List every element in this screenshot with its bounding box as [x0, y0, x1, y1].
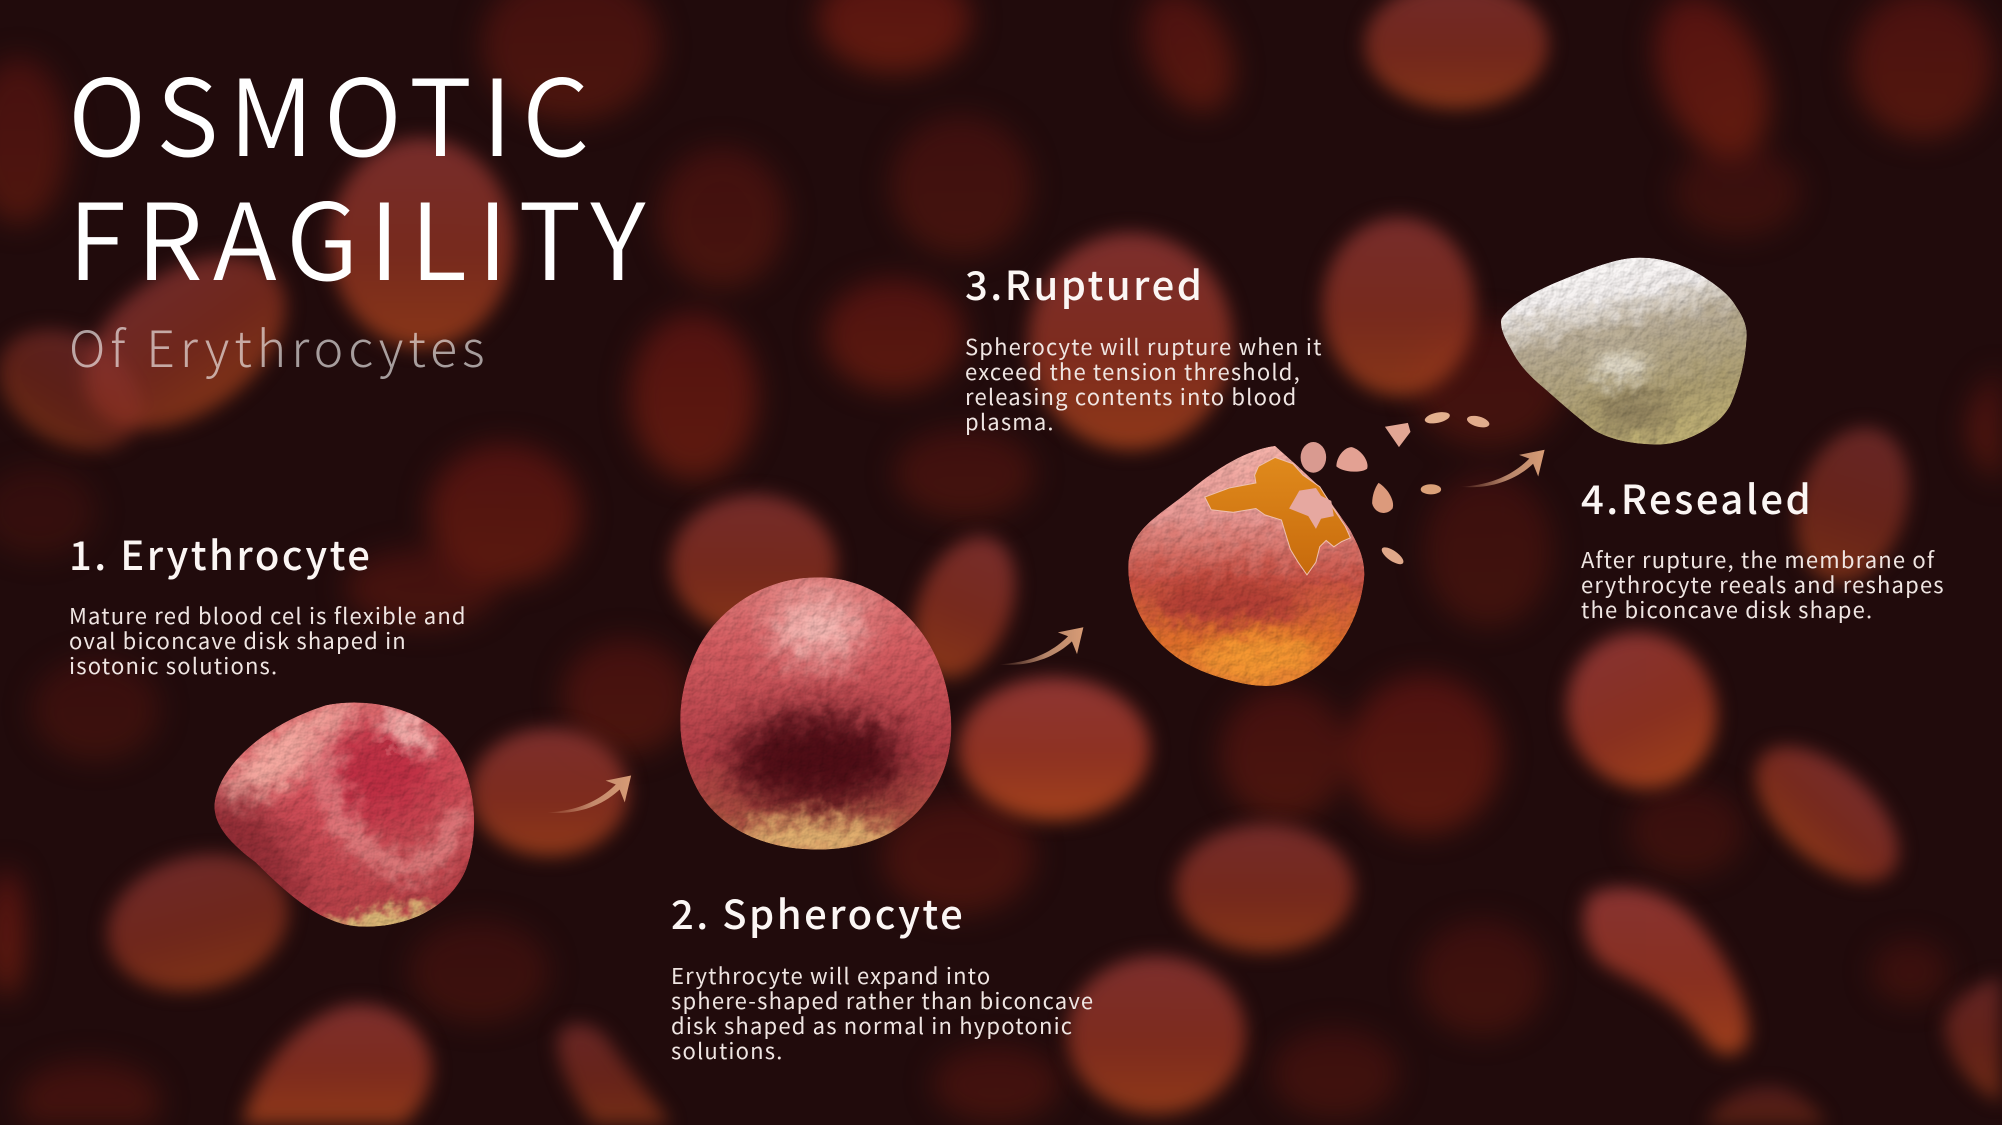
arrow: ruptured to resealed — [1459, 450, 1545, 487]
step 1 description: Mature red blood cel is flexible and — [69, 599, 467, 631]
title: OSMOTIC — [68, 33, 599, 187]
arrow: erythrocyte to spherocyte — [546, 776, 631, 813]
membrane fragments — [1289, 410, 1491, 567]
step 3 description — [965, 330, 1323, 437]
step 3 text — [965, 254, 1323, 437]
cell 3: ruptured spherocyte — [1128, 446, 1364, 686]
step 3 description: releasing contents into blood — [965, 380, 1297, 412]
subtitle: Of Erythrocytes — [69, 310, 490, 382]
step 2 description — [671, 959, 1094, 1066]
step 2 description: disk shaped as normal in hypotonic — [671, 1009, 1073, 1041]
cell 4: resealed erythrocyte — [1501, 258, 1747, 444]
title: FRAGILITY — [68, 157, 656, 311]
step 4 description: After rupture, the membrane of — [1581, 543, 1935, 575]
step 3 heading: 3.Ruptured — [965, 254, 1204, 312]
step 2 text — [671, 883, 1094, 1066]
step 1 description — [69, 599, 467, 681]
step 4 description: erythrocyte reeals and reshapes — [1581, 568, 1945, 600]
step 4 heading: 4.Resealed — [1581, 468, 1813, 526]
cell 2: spherocyte — [680, 578, 952, 850]
step 3 description: exceed the tension threshold, — [965, 355, 1301, 387]
step 2 description: solutions. — [671, 1034, 784, 1066]
step 4 description — [1581, 543, 1945, 625]
arrow: spherocyte to ruptured — [998, 627, 1083, 665]
step 3 description: plasma. — [965, 405, 1055, 437]
ruptured opening — [1205, 457, 1350, 575]
step 1 heading: 1. Erythrocyte — [69, 524, 372, 582]
step 1 description: oval biconcave disk shaped in — [69, 624, 407, 656]
step 2 description: sphere-shaped rather than biconcave — [671, 984, 1094, 1016]
step 3 description: Spherocyte will rupture when it — [965, 330, 1323, 362]
step 4 text — [1581, 468, 1945, 625]
step 4 description: the biconcave disk shape. — [1581, 593, 1873, 625]
step 2 description: Erythrocyte will expand into — [671, 959, 991, 991]
cell 1: erythrocyte biconcave disk — [214, 702, 474, 927]
step 1 text — [69, 524, 467, 681]
title — [68, 33, 656, 311]
step 2 heading: 2. Spherocyte — [671, 883, 965, 941]
step 1 description: isotonic solutions. — [69, 649, 278, 681]
